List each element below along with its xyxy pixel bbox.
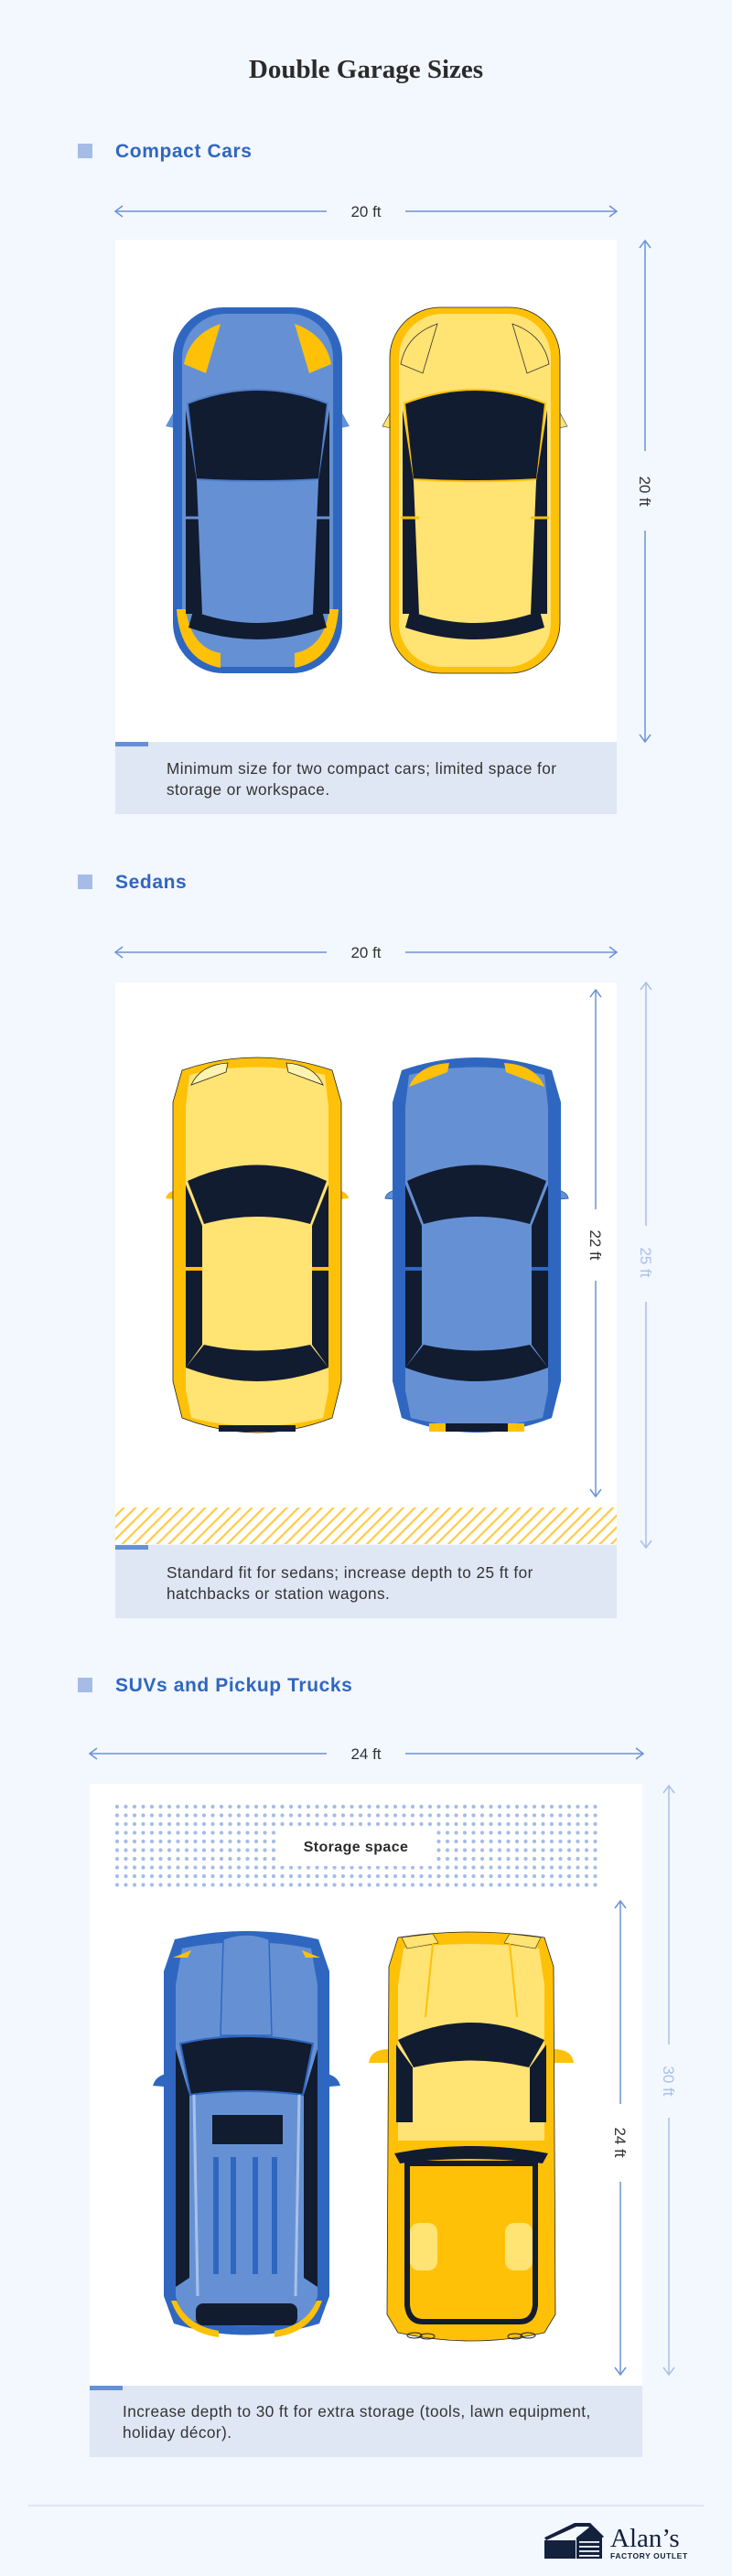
car: yellow sedan	[166, 1057, 349, 1433]
dimension arrow: width 20 ft: 20 ft	[350, 944, 382, 961]
caption: SUVs: holiday décor).	[123, 2423, 231, 2442]
section: compact cars	[78, 141, 653, 814]
section: SUVs and pickup trucks	[78, 1675, 677, 2457]
title: Double Garage Sizes	[249, 55, 483, 84]
extra depth hatch strip	[115, 1508, 617, 1544]
section: sedans	[78, 872, 654, 1618]
heading: sedans	[78, 872, 187, 893]
caption: compact: Minimum size for two compact cars; limited space for	[167, 759, 556, 778]
dimension arrow: depth 25 ft: 25 ft	[637, 1247, 654, 1278]
dimension arrow: depth 30 ft	[660, 1786, 677, 2375]
car: yellow compact	[382, 307, 567, 673]
caption: compact: storage or workspace.	[167, 780, 330, 799]
panel: SUV garage	[90, 1784, 642, 2386]
logo: Alan's Factory Outlet: Alan’s	[610, 2524, 680, 2553]
dimension arrow: depth 24 ft: 24 ft	[611, 2127, 629, 2158]
dimension arrow: depth 30 ft: 30 ft	[660, 2066, 677, 2097]
dimension arrow: depth 22 ft: 22 ft	[587, 1229, 604, 1261]
dimension arrow: depth 25 ft	[637, 982, 654, 1548]
logo: Alan's Factory Outlet: FACTORY OUTLET	[610, 2551, 688, 2560]
car: blue compact	[166, 307, 350, 673]
caption: sedans	[115, 1545, 617, 1618]
caption: sedans: Standard fit for sedans; increase depth to 25 ft for	[167, 1563, 533, 1582]
caption: sedans: hatchbacks or station wagons.	[167, 1584, 390, 1603]
caption: SUVs	[90, 2386, 642, 2457]
caption: SUVs: Increase depth to 30 ft for extra storage (tools, lawn equipment,	[123, 2402, 591, 2420]
logo: Alan's Factory Outlet	[544, 2523, 688, 2560]
dimension arrow: depth 20 ft: 20 ft	[636, 476, 653, 507]
dimension arrow: depth 22 ft	[587, 990, 604, 1497]
car: yellow pickup truck	[369, 1932, 574, 2341]
dimension arrow: depth 20 ft	[636, 241, 653, 742]
icon: garage	[544, 2523, 604, 2559]
panel: sedan garage	[115, 982, 617, 1544]
dimension arrow: width 20 ft	[115, 944, 617, 961]
dimension arrow: width 24 ft: 24 ft	[350, 1745, 382, 1763]
dimension arrow: width 24 ft	[90, 1745, 643, 1763]
car: blue SUV	[153, 1931, 340, 2337]
storage space area: Storage space	[304, 1840, 408, 1855]
dimension arrow: depth 24 ft	[611, 1901, 629, 2375]
dimension arrow: width 20 ft	[115, 203, 617, 220]
panel: compact garage	[115, 240, 617, 742]
heading: sedans: Sedans	[115, 872, 187, 893]
heading: SUVs: SUVs and Pickup Trucks	[115, 1675, 352, 1696]
caption: compact	[115, 742, 617, 814]
heading: compact cars: Compact Cars	[115, 141, 253, 162]
storage space area	[114, 1804, 600, 1891]
car: blue sedan	[385, 1057, 568, 1433]
dimension arrow: width 20 ft: 20 ft	[350, 203, 382, 220]
